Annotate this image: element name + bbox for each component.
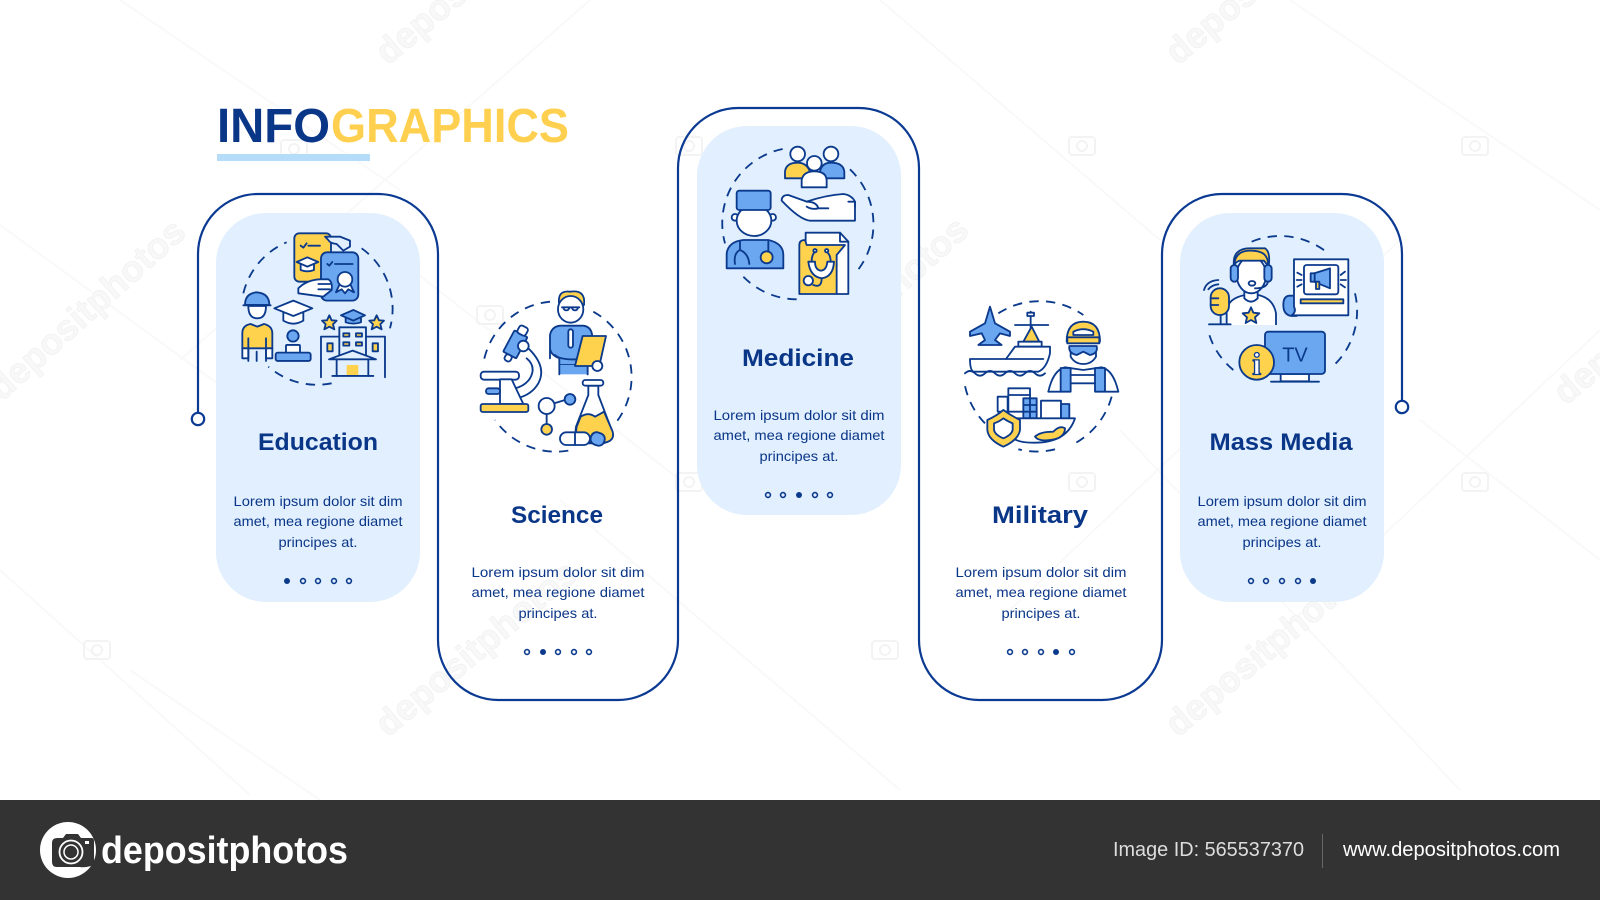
icon: education — [242, 233, 393, 385]
text block: military: Lorem ipsum dolor sit dim — [956, 564, 1126, 580]
text block: education: Lorem ipsum dolor sit dim — [234, 493, 402, 509]
text block: military: amet, mea regione diamet — [956, 584, 1127, 600]
text block: education — [234, 493, 403, 550]
text block: education: amet, mea regione diamet — [234, 513, 403, 529]
title: GRAPHICS — [331, 100, 569, 153]
text block: medicine — [714, 407, 885, 464]
text block: medicine: principes at. — [760, 448, 838, 464]
icon: mass media: TV — [1282, 345, 1308, 367]
text block: military — [956, 564, 1127, 621]
watermark layer: depositphotos — [1157, 552, 1375, 744]
panel background: medicine — [697, 126, 901, 515]
text block: science — [472, 564, 645, 621]
pagination dots: medicine — [766, 492, 832, 498]
image id: Image ID: 565537370 — [1113, 839, 1304, 861]
logo wordmark: depositphotos — [101, 830, 348, 872]
text block: science: principes at. — [518, 605, 598, 621]
text block: education: principes at. — [278, 534, 358, 550]
text block: mass media: principes at. — [1242, 534, 1322, 550]
text block: science: Lorem ipsum dolor sit dim — [472, 564, 644, 580]
heading: science: Science — [511, 502, 603, 529]
icon: military — [964, 301, 1118, 452]
panel: military — [956, 301, 1127, 655]
heading: medicine: Medicine — [742, 345, 854, 372]
heading: military: Military — [992, 502, 1088, 529]
text block: medicine: Lorem ipsum dolor sit dim — [714, 407, 884, 423]
icon: mass media: i — [1252, 346, 1261, 382]
text block: medicine: amet, mea regione diamet — [714, 427, 885, 443]
heading: education: Education — [258, 429, 378, 456]
icon: mass media — [1204, 236, 1357, 382]
text block: military: principes at. — [1002, 605, 1080, 621]
panel: medicine — [714, 147, 885, 498]
pagination dots: military — [1008, 649, 1074, 655]
pagination dots: science — [525, 649, 591, 655]
panel: science — [472, 291, 645, 655]
title: INFO — [217, 100, 330, 153]
connecting outline — [192, 108, 1408, 700]
pagination dots: education — [284, 578, 351, 584]
text block: mass media — [1198, 493, 1367, 550]
icon: camera logo — [40, 822, 96, 878]
icon: science — [481, 291, 632, 452]
icon: medicine — [722, 147, 873, 299]
text block: mass media: Lorem ipsum dolor sit dim — [1198, 493, 1366, 509]
pagination dots: mass media — [1249, 578, 1316, 584]
text block: mass media: amet, mea regione diamet — [1198, 513, 1367, 529]
panel: education — [234, 233, 403, 584]
title — [217, 100, 569, 153]
text block: science: amet, mea regione diamet — [472, 584, 645, 600]
watermark layer: depositphotos — [763, 208, 976, 406]
heading: mass media: Mass Media — [1210, 429, 1353, 456]
panel background: mass media — [1180, 213, 1384, 602]
panel: mass media — [1198, 236, 1367, 584]
panel backgrounds: education — [216, 213, 420, 602]
website url: www.depositphotos.com — [1342, 839, 1560, 861]
title underline — [217, 154, 370, 161]
footer bar — [0, 800, 1600, 900]
watermark layer: depositphotos — [367, 552, 585, 744]
